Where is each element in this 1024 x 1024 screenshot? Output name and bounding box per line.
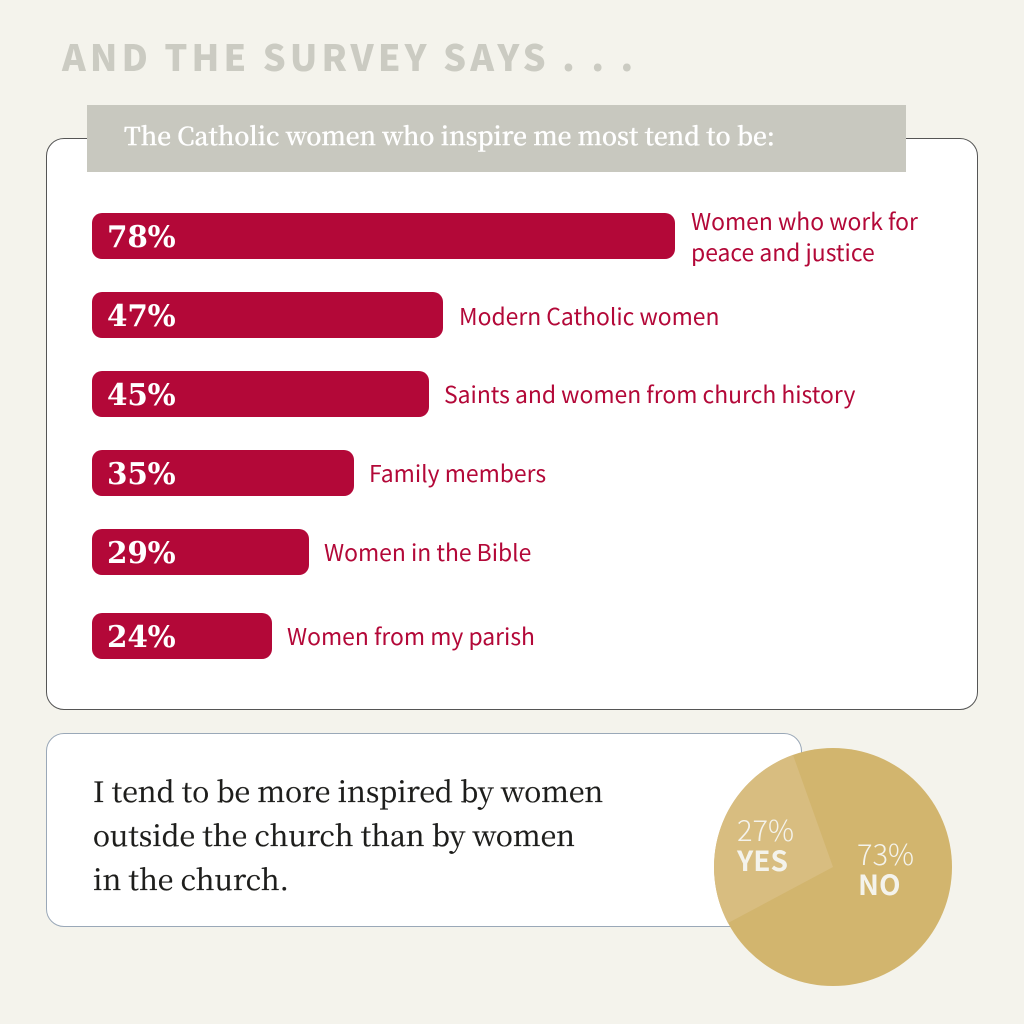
bar: 35% [92, 450, 354, 496]
label: 29%: Women in the Bible [324, 534, 531, 568]
statement text [93, 770, 603, 899]
bar: 24%: 24% [107, 619, 175, 654]
label: 45%: Saints and women from church history [444, 376, 855, 410]
label: 47%: Modern Catholic women [459, 298, 719, 332]
label: 78%: Women who work for [691, 203, 918, 237]
pie chart: 27% [737, 808, 794, 850]
bar: 78% [92, 213, 675, 259]
panel: statement [46, 733, 802, 927]
label: 78%: peace and justice [691, 234, 875, 268]
statement text: I tend to be more inspired by women [93, 770, 603, 811]
statement text: outside the church than by women [93, 814, 575, 855]
statement text: in the church. [93, 858, 289, 899]
bar: 47%: 47% [107, 298, 175, 333]
bar: 29% [92, 529, 309, 575]
bar: 24% [92, 613, 272, 659]
panel: inspiring women survey [46, 138, 978, 710]
pie chart: 73% [857, 832, 914, 874]
label: 78% [691, 203, 918, 268]
label: 24%: Women from my parish [287, 618, 535, 652]
bar: 47% [92, 292, 443, 338]
pie chart: YES [736, 840, 788, 880]
panel heading: The Catholic women who inspire me most tend to be: [124, 117, 775, 153]
bar: 78%: 78% [107, 219, 175, 254]
title: AND THE SURVEY SAYS . . . [62, 30, 637, 82]
label: 35%: Family members [369, 454, 546, 488]
pie chart: NO [858, 864, 901, 904]
bar: 45%: 45% [107, 377, 175, 412]
bar: 35%: 35% [107, 456, 175, 491]
bar: 29%: 29% [107, 535, 175, 570]
panel heading [87, 105, 906, 172]
bar: 45% [92, 371, 429, 417]
